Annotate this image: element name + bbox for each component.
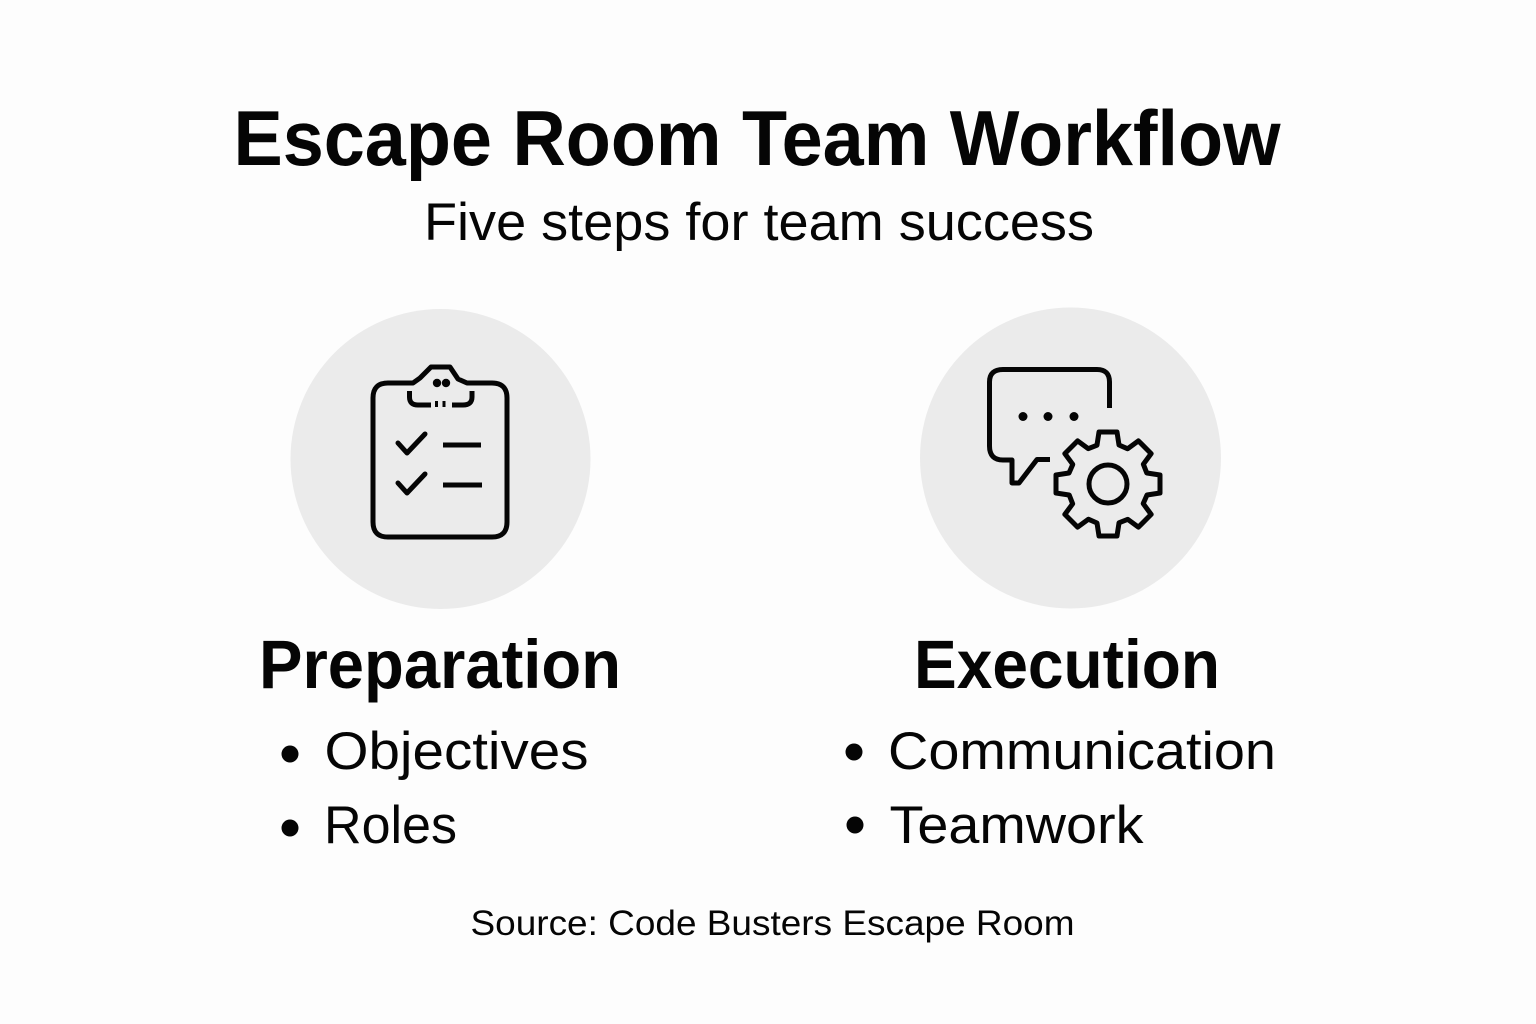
bullet list: preparation: Roles [324, 796, 457, 855]
heading: preparation: Preparation [259, 626, 621, 703]
source note: Source: Code Busters Escape Room [470, 903, 1074, 943]
bullet list: preparation: Objectives [324, 722, 588, 781]
panel: preparation [259, 309, 621, 855]
heading: execution: Execution [914, 626, 1220, 703]
bullet list: execution [846, 722, 1276, 855]
title: Escape Room Team Workflow [234, 94, 1281, 182]
bullet list: preparation [282, 722, 588, 855]
bullet list: execution: Teamwork [890, 796, 1144, 855]
subtitle: Five steps for team success [424, 193, 1094, 252]
icon circle: execution [920, 308, 1221, 608]
panel: execution [846, 308, 1276, 855]
icon: speech bubble and gear [990, 370, 1160, 536]
icon circle: preparation [290, 309, 590, 609]
icon: clipboard checklist [373, 367, 507, 537]
bullet list: execution: Communication [888, 722, 1276, 781]
